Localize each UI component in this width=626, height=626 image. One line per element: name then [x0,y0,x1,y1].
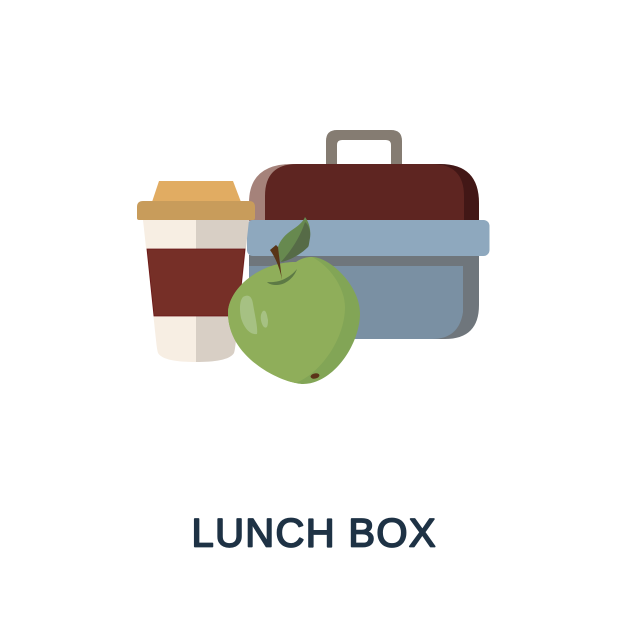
apple leaf [278,217,310,262]
icon: green apple [228,217,360,384]
cup lid top [152,181,241,202]
cup sleeve [147,249,245,316]
apple lit side [228,257,345,383]
apple stem [270,245,282,280]
title: LUNCH BOX [192,512,436,556]
apple body [228,257,360,384]
handle [326,130,402,165]
cup body [143,220,249,362]
lid [249,164,479,221]
icon: coffee cup [137,181,255,362]
apple base [310,373,320,379]
blue band [247,220,490,256]
box body [249,255,479,339]
cup lid rim [137,201,255,220]
apple crease [267,269,297,285]
apple highlights [240,296,268,334]
icon: lunch box [247,130,490,339]
